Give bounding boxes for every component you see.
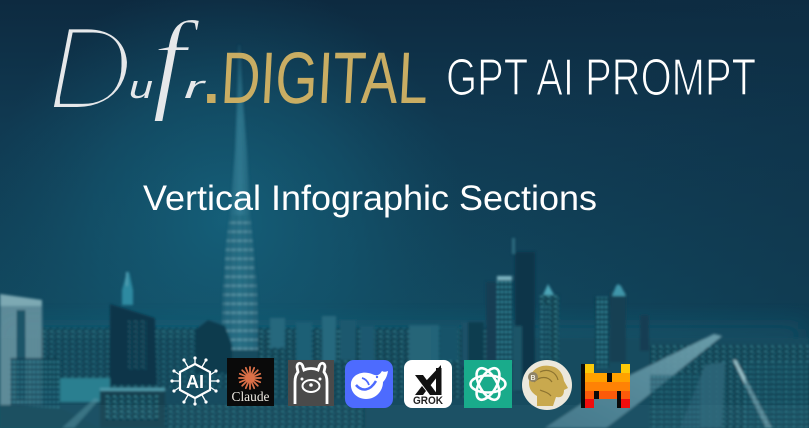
right tower, tall and dark — [512, 238, 535, 392]
icon: AI circuit hexagon — [170, 356, 220, 406]
icon: Grok: GROK — [413, 395, 443, 407]
spire building — [122, 272, 133, 305]
icon: AI circuit hexagon: AI — [186, 372, 204, 392]
logotype script: Dufr: r — [184, 69, 207, 105]
heading: Dufr.DIGITAL logotype — [46, 0, 430, 136]
Burj Khalifa tower — [222, 45, 258, 350]
logotype dot: . — [203, 49, 220, 116]
icon: DeepSeek whale — [345, 360, 393, 408]
side road — [733, 360, 772, 428]
logotype script: Dufr — [46, 0, 207, 136]
far right slim tower — [640, 315, 649, 351]
icon: golden portrait: B — [530, 375, 536, 382]
subtitle: Vertical Infographic Sections — [143, 178, 597, 218]
icon: Claude: Claude — [232, 390, 270, 405]
road — [545, 334, 722, 428]
right tower with bright crown — [540, 284, 559, 367]
icon: golden portrait — [522, 360, 572, 410]
logotype script: Dufr: u — [129, 69, 153, 105]
bottom haze — [0, 405, 809, 428]
icon row — [170, 356, 630, 410]
right tower, teal facade — [486, 276, 512, 367]
logotype script: Dufr: D — [46, 0, 134, 136]
horizon haze — [0, 320, 809, 350]
icon: Grok — [404, 360, 452, 408]
dark curved tower centre — [195, 320, 232, 372]
distant low-rise city band — [0, 316, 809, 428]
icon: Claude — [227, 358, 274, 406]
icon: Ollama llama — [288, 360, 334, 406]
right dense city — [650, 362, 809, 428]
logotype script: Dufr: f — [152, 0, 201, 123]
foreground blocks left — [0, 398, 365, 428]
icon: ChatGPT knot — [464, 360, 512, 408]
low podium left — [10, 358, 110, 408]
low towers right cluster — [409, 322, 484, 365]
icon: Mistral pixel M — [581, 364, 630, 408]
right tower pair — [595, 284, 626, 367]
left dome building — [0, 294, 42, 405]
logotype digital: DIGITAL — [219, 38, 430, 119]
podium building centre — [100, 388, 165, 428]
dark curved tower left — [109, 304, 157, 385]
